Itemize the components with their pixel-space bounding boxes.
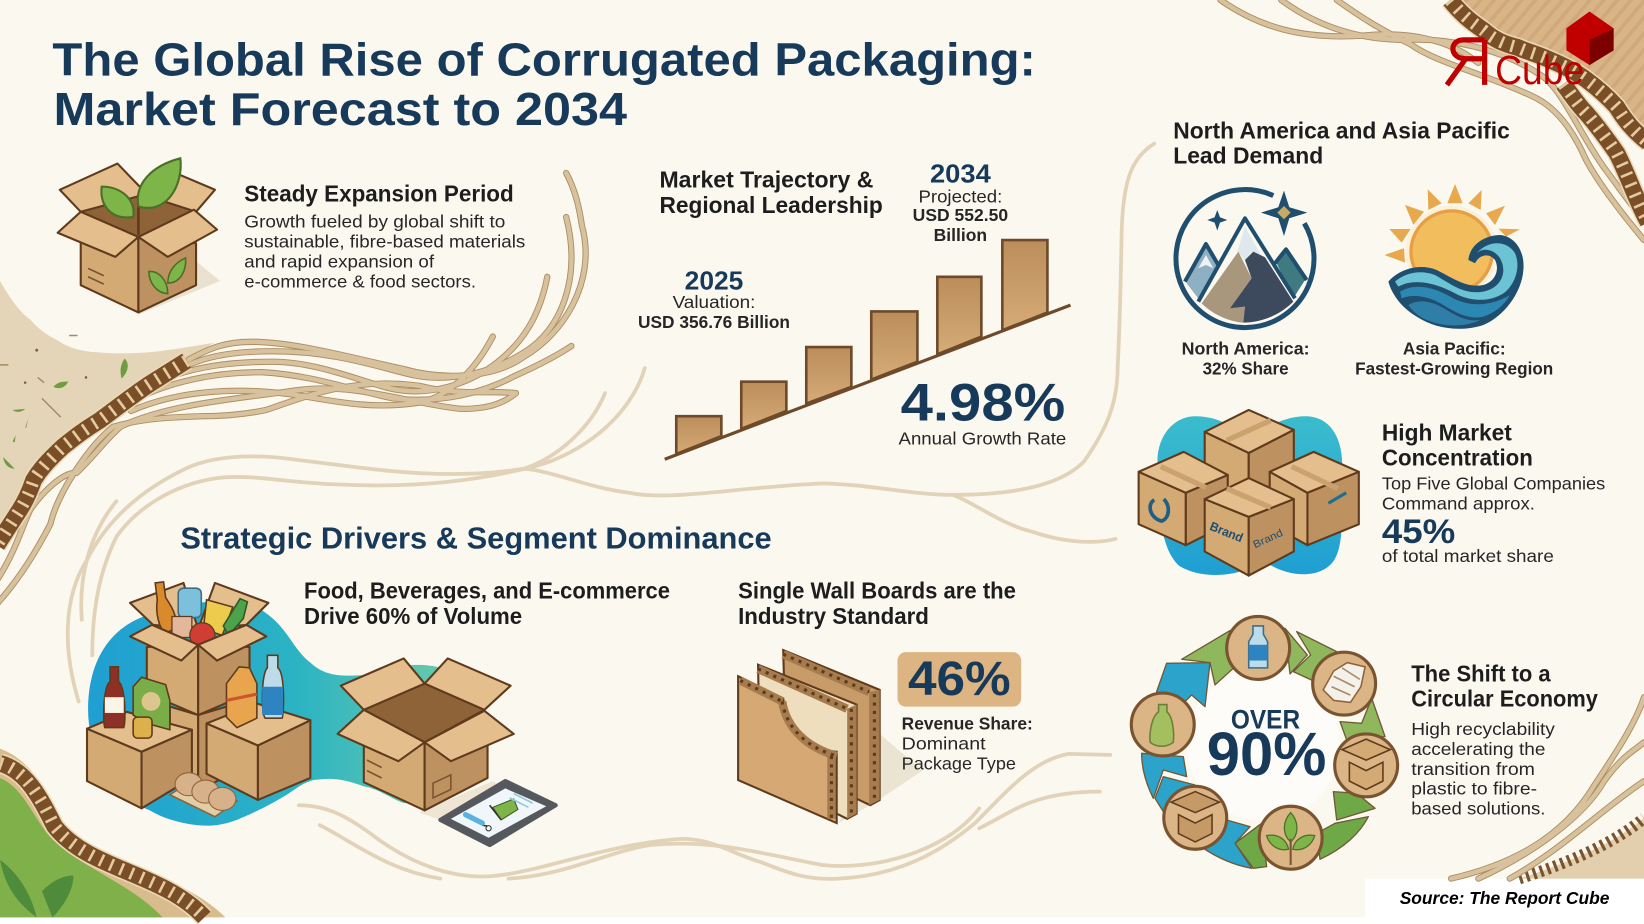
food: items in top box [130,582,268,648]
text: single wall boards: Single Wall Boards are the [738,578,1016,604]
icon: branded boxes on blob [1139,410,1359,576]
title [52,33,1036,135]
decoration: cardboard corner bottom right [1451,697,1644,879]
text block: circular economy: The Shift to a [1411,660,1551,686]
text block: steady expansion: and rapid expansion of [244,251,434,271]
decoration: corrugated band left [0,361,187,545]
title: The Global Rise of Corrugated Packaging: [52,33,1036,85]
heading: regional demand: Lead Demand [1173,143,1323,169]
heading: strategic drivers: Strategic Drivers & Segment Dominance [180,521,772,555]
stat: growth rate: Annual Growth Rate [899,429,1066,449]
ring: icon box [1335,734,1398,797]
text block: circular economy: transition from [1411,759,1535,779]
icon: food boxes illustration [87,582,466,826]
stat: 46 percent: 46% [908,652,1011,706]
text: food and e-commerce: Drive 60% of Volume [304,603,522,629]
labels: regions: North America: [1182,338,1310,358]
icon: open box [338,658,524,839]
text block: steady expansion [244,180,525,291]
title: Market Forecast to 2034 [53,83,627,135]
labels: regions: 32% Share [1203,358,1289,378]
ring: icon glass bottle [1131,693,1194,756]
label: 2025 valuation: Valuation: [673,292,755,312]
heading: market trajectory: Market Trajectory & [659,167,873,193]
labels: regions: Fastest-Growing Region [1355,358,1553,378]
icon: tablet with cart [440,781,556,845]
decoration: tan paper top left [0,281,214,540]
food: egg tray [170,773,237,817]
stat: growth rate: 4.98% [901,374,1065,432]
decoration: fibre strands left [0,173,586,603]
ring: icon bottle [1227,616,1290,679]
text: revenue share: Package Type [902,754,1016,774]
text block: circular economy: plastic to fibre- [1411,779,1537,799]
text block: market concentration: 45% [1382,513,1455,551]
logo: RCube: Cube [1495,47,1584,93]
text: food and e-commerce: Food, Beverages, and E-commerce [304,578,670,604]
food: items on lower boxes [104,655,284,738]
text: single wall boards: Industry Standard [738,603,929,629]
label: 2034 projection [913,158,1008,245]
icon: branded boxes on blob: Brand [1208,519,1245,545]
label: 2025 valuation: USD 356.76 Billion [638,312,790,332]
text block: circular economy: Circular Economy [1411,686,1598,712]
text block: circular economy: High recyclability [1411,719,1555,739]
ring: icon recycled box [1164,786,1227,849]
text: food and e-commerce [304,578,670,629]
text block: steady expansion: Steady Expansion Period [244,180,514,206]
decoration: faint flowing strands [68,144,1154,879]
bottom white strip [0,879,1644,924]
icon: mountain north america [1176,190,1314,328]
ring: icon sprout [1259,806,1322,869]
text block: market concentration: Top Five Global Companies [1382,474,1605,494]
text: revenue share: Dominant [902,734,986,754]
text block: market concentration: Command approx. [1382,494,1535,514]
text: single wall boards [738,578,1016,629]
text block: circular economy [1411,660,1598,819]
text block: market concentration: Concentration [1382,445,1533,471]
chart: circular economy ring: OVER [1231,704,1300,735]
icon: branded boxes on blob: Brand [1252,528,1285,551]
source note: Source: The Report Cube [1400,888,1609,908]
label: 2034 projection: Billion [934,225,987,245]
text: revenue share [902,714,1033,774]
heading: market trajectory [659,167,883,218]
decoration: cardboard corner top right [1220,0,1644,240]
labels: regions: Asia Pacific: [1403,338,1506,358]
text block: steady expansion: e-commerce & food sectors. [244,271,476,291]
text block: steady expansion: Growth fueled by global shift to [244,212,505,232]
label: 2025 valuation: 2025 [685,265,743,295]
text: revenue share: Revenue Share: [902,714,1033,734]
stat: growth rate [899,374,1066,449]
icon: corrugated boards [738,650,923,823]
label: 2034 projection: Projected: [918,186,1002,206]
heading: regional demand: North America and Asia Pacific [1173,117,1510,143]
ring: icon crumpled paper [1313,652,1376,715]
logo: RCube [1447,12,1614,93]
heading: regional demand [1173,117,1510,169]
heading: market trajectory: Regional Leadership [659,192,883,218]
decoration: green leaf corner bottom left [0,749,225,917]
bar chart [665,240,1070,459]
icon: open box with sprout [58,158,220,315]
text block: market concentration: of total market share [1382,546,1554,566]
chart: circular economy ring: 90% [1207,720,1326,788]
chart: circular economy ring [1131,616,1398,869]
labels: regions [1182,338,1553,378]
text block: market concentration: High Market [1382,419,1512,445]
label: 2034 projection: USD 552.50 [913,205,1008,225]
text block: circular economy: accelerating the [1411,739,1546,759]
label: 2025 valuation [638,265,790,332]
label: 2034 projection: 2034 [930,158,991,188]
icon: sun and wave asia pacific [1384,184,1524,329]
text block: steady expansion: sustainable, fibre-based materials [244,231,525,251]
text block: circular economy: based solutions. [1411,799,1545,819]
text block: market concentration [1382,419,1605,566]
